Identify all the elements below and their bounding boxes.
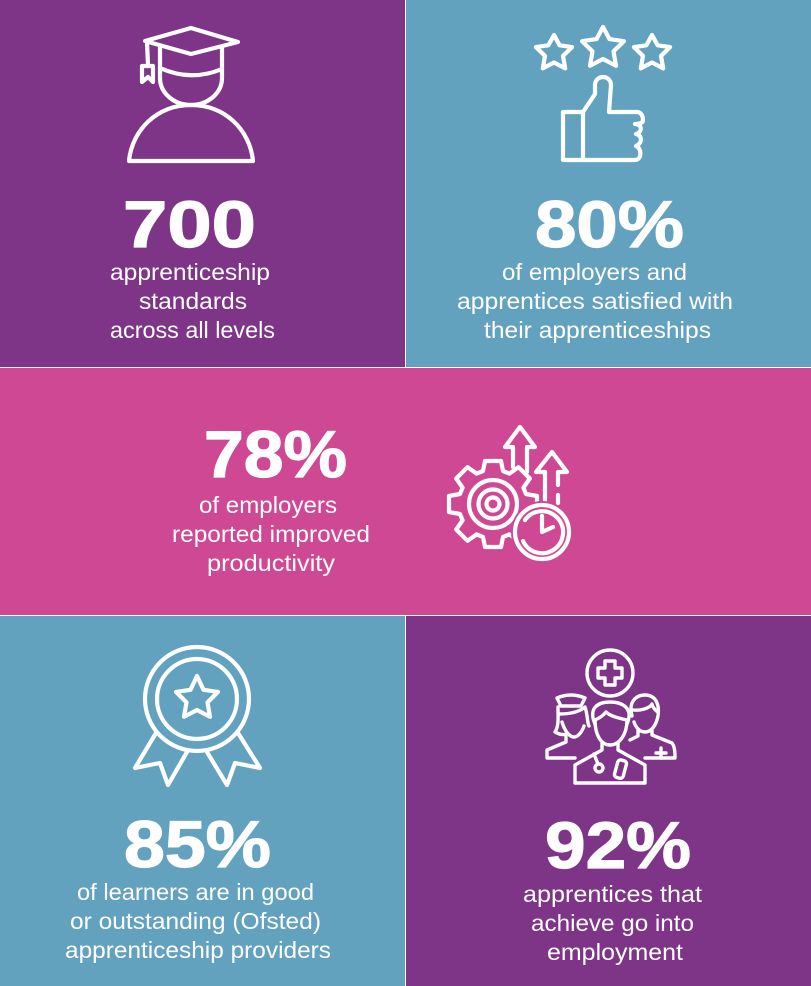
stat: 78%: 78%	[204, 417, 347, 491]
panel: 700 standards	[0, 0, 405, 367]
panel: 78% productivity	[0, 368, 811, 615]
icon: gear, clock and arrows	[449, 427, 573, 563]
icon: stars and thumbs up	[536, 27, 670, 160]
text: 80% description: apprentices satisfied with	[457, 288, 733, 314]
text: 700 description: across all levels	[110, 317, 275, 343]
text: 92% description	[523, 881, 703, 965]
text: 78% description: reported improved	[172, 521, 370, 547]
text: 78% description: productivity	[207, 550, 336, 576]
text: 700 description: apprenticeship	[110, 259, 270, 285]
icon: rosette	[135, 647, 260, 785]
stat: 80%: 80%	[535, 187, 684, 261]
stat: 92%: 92%	[545, 808, 691, 882]
text: 700 description: standards	[139, 288, 247, 314]
text: 80% description: their apprenticeships	[484, 317, 711, 343]
text: 85% description: apprenticeship providers	[65, 937, 331, 963]
icon: medical team	[547, 650, 675, 783]
text: 78% description: of employers	[199, 492, 337, 518]
text: 78% description	[172, 492, 370, 576]
text: 92% description: apprentices that	[523, 881, 703, 907]
panel: 92% into employment	[406, 616, 811, 986]
text: 80% description	[457, 259, 733, 343]
text: 85% description	[65, 879, 331, 963]
text: 700 description	[110, 259, 275, 343]
panel: 85% good or outstanding	[0, 616, 405, 986]
text: 80% description: of employers and	[502, 259, 687, 285]
panel: 80% satisfied	[406, 0, 811, 367]
text: 92% description: employment	[547, 939, 684, 965]
stat: 85%: 85%	[124, 807, 271, 881]
text: 85% description: or outstanding (Ofsted)	[70, 908, 321, 934]
text: 92% description: achieve go into	[531, 910, 694, 936]
stat: 700: 700	[123, 187, 256, 261]
icon: graduate	[129, 28, 253, 161]
text: 85% description: of learners are in good	[77, 879, 314, 905]
